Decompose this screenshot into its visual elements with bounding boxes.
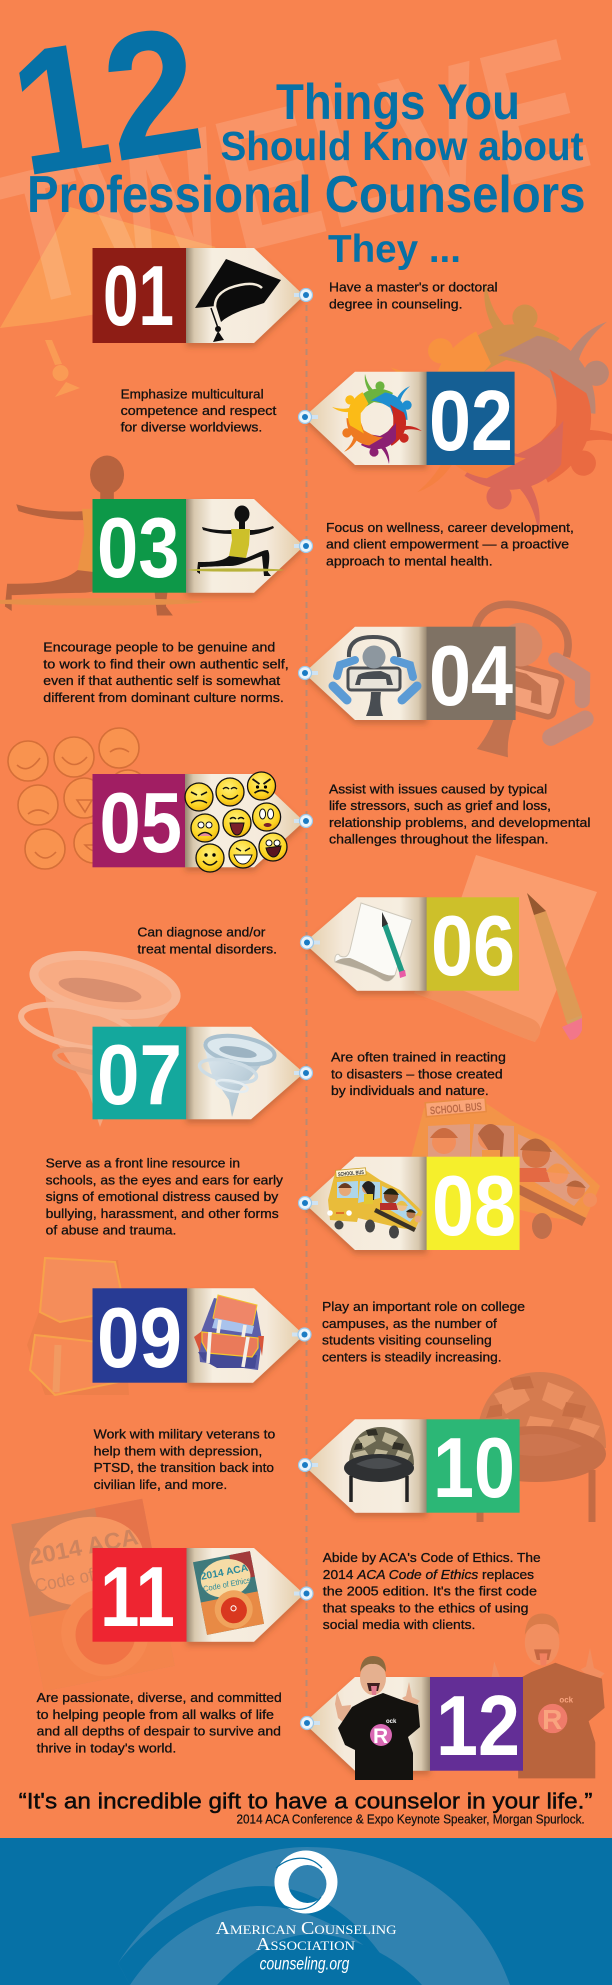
quote: “It's an incredible gift to have a counselor in your life.” — [19, 1788, 592, 1813]
text 09: students visiting counseling — [322, 1333, 492, 1348]
text 01: Have a master's or doctoral — [329, 280, 498, 295]
number square 09 — [92, 1288, 187, 1383]
connector 05 — [294, 814, 312, 828]
watermark: code of ethics book — [11, 1499, 175, 1691]
watermark: paper and pencil — [414, 855, 597, 1042]
title: Things You: Things You — [276, 74, 520, 130]
icon: backpack — [194, 1295, 264, 1370]
text 01 — [329, 280, 498, 312]
tag 09 — [187, 1288, 304, 1383]
text 07: to disasters – those created — [331, 1066, 503, 1081]
number 09: 09 — [97, 1291, 182, 1386]
tag 07 — [186, 1027, 304, 1119]
text 08 — [46, 1156, 284, 1238]
card 03 — [92, 499, 312, 596]
text 02: for diverse worldviews. — [121, 420, 262, 435]
icon: school bus — [327, 1168, 423, 1238]
text 09: Play an important role on college — [322, 1299, 525, 1314]
connector 06 — [300, 936, 320, 949]
text 02: competence and respect — [121, 403, 277, 418]
text 03: and client empowerment — a proactive — [326, 537, 569, 552]
text 05 — [329, 781, 591, 847]
text 11: the 2005 edition. It's the first code — [323, 1584, 537, 1599]
text 05: relationship problems, and developmental — [329, 815, 591, 830]
text 01: degree in counseling. — [329, 296, 462, 312]
number 04: 04 — [429, 629, 513, 724]
watermark: emoji faces — [8, 728, 148, 869]
watermark: diversity ring — [373, 277, 612, 537]
tag 12 — [304, 1677, 430, 1771]
organization name — [216, 1918, 396, 1954]
text 09 — [322, 1299, 525, 1364]
icon: diversity ring — [329, 374, 425, 464]
text 08: of abuse and trauma. — [46, 1223, 176, 1238]
quote attribution: 2014 ACA Conference & Expo Keynote Speaker, Morgan Spurlock. — [236, 1812, 585, 1826]
organization name: Association — [256, 1934, 356, 1954]
number square 10 — [427, 1419, 520, 1513]
number 03: 03 — [97, 501, 180, 596]
text 06 — [137, 925, 277, 956]
text 06: Can diagnose and/or — [137, 925, 266, 940]
number 11: 11 — [100, 1550, 175, 1645]
card 10 — [298, 1419, 520, 1516]
text 10 — [94, 1427, 275, 1492]
text 11: that speaks to the ethics of using — [323, 1600, 528, 1616]
text 10: help them with depression, — [94, 1443, 262, 1458]
connector 12 — [300, 1716, 320, 1730]
text 11: Abide by ACA's Code of Ethics. The — [323, 1550, 541, 1565]
text 08: Serve as a front line resource in — [46, 1156, 240, 1171]
footer arcs — [118, 1847, 510, 1985]
number 02: 02 — [429, 374, 513, 469]
card 05 — [92, 772, 312, 872]
text 07 — [331, 1050, 506, 1098]
connector 08 — [298, 1196, 318, 1210]
text 10: PTSD, the transition back into — [94, 1460, 274, 1475]
card 09 — [92, 1288, 311, 1386]
number square 01 — [92, 248, 186, 343]
text 03: Focus on wellness, career development, — [326, 520, 574, 535]
connector 03 — [294, 540, 312, 552]
text 07: by individuals and nature. — [331, 1083, 489, 1098]
connector 11 — [294, 1587, 313, 1600]
connector 09 — [292, 1328, 311, 1341]
text 12: Are passionate, diverse, and committed — [37, 1690, 282, 1705]
watermark: backpack — [27, 1258, 129, 1395]
icon: keynote speaker photo — [335, 1656, 420, 1780]
text 11: 2014 ACA Code of Ethics replaces — [323, 1567, 535, 1582]
tag 01 — [186, 248, 304, 343]
text 06: treat mental disorders. — [137, 942, 277, 956]
card 12 — [300, 1656, 523, 1780]
number square 11 — [92, 1548, 186, 1642]
watermark: graduation cap — [0, 207, 216, 397]
logo ring — [274, 1850, 337, 1914]
text 03: approach to mental health. — [326, 554, 493, 568]
text 08: bullying, harassment, and other forms — [46, 1206, 279, 1221]
text 04: to work to find their own authentic self, — [43, 656, 289, 672]
connector 04 — [298, 666, 318, 680]
tag 11 — [186, 1548, 304, 1642]
tag 06 — [304, 897, 427, 991]
watermark: helmet — [466, 1372, 606, 1522]
text 04 — [43, 640, 289, 705]
text 05: Assist with issues caused by typical — [329, 781, 547, 796]
text 12: thrive in today's world. — [37, 1740, 176, 1756]
text 02: Emphasize multicultural — [121, 386, 264, 401]
number square 07 — [92, 1027, 186, 1119]
icon: tornado — [198, 1031, 277, 1117]
text 04: different from dominant culture norms. — [43, 690, 284, 705]
icon: paper and pencil — [335, 903, 412, 981]
icon: yoga figure — [188, 506, 284, 576]
text 12 — [37, 1690, 282, 1756]
number square 12 — [430, 1677, 523, 1771]
icon: graduation cap — [195, 259, 281, 342]
number square 08 — [427, 1157, 520, 1250]
text 10: Work with military veterans to — [94, 1427, 275, 1442]
card 04 — [298, 627, 516, 724]
text 08: signs of emotional distress caused by — [46, 1189, 279, 1204]
icon: emoji faces — [185, 772, 287, 872]
watermark: keynote speaker — [492, 1613, 605, 1778]
number square 05 — [92, 774, 185, 867]
organization name: American Counseling — [216, 1918, 396, 1938]
watermark: school bus — [408, 1098, 600, 1239]
icon: counselling desk figure — [333, 637, 417, 716]
watermark: yoga figure — [0, 455, 202, 616]
connector 01 — [294, 288, 312, 302]
title block — [0, 0, 586, 271]
connector 10 — [298, 1458, 318, 1472]
tag 04 — [304, 627, 427, 720]
tag 03 — [186, 499, 304, 593]
text 08: schools, as the eyes and ears for early — [46, 1172, 284, 1188]
text 12: and all depths of despair to survive and — [37, 1724, 281, 1739]
text 02 — [121, 386, 277, 435]
connector 02 — [298, 410, 318, 424]
number square 03 — [92, 499, 186, 593]
number 01: 01 — [103, 249, 174, 344]
watermark: tornado — [17, 946, 181, 1127]
tag 02 — [304, 372, 427, 465]
number 07: 07 — [97, 1028, 182, 1123]
card 08 — [298, 1157, 520, 1254]
tag 05 — [185, 774, 304, 867]
number 08: 08 — [432, 1159, 516, 1254]
text 04: Encourage people to be genuine and — [43, 640, 275, 655]
text 04: even if that authentic self is somewhat — [43, 673, 281, 688]
card 02 — [298, 372, 515, 469]
icon: code of ethics book — [193, 1551, 264, 1635]
text 05: life stressors, such as grief and loss, — [329, 798, 551, 813]
connector 07 — [294, 1066, 312, 1080]
card 11 — [92, 1548, 313, 1645]
card 01 — [92, 248, 312, 344]
number square 06 — [427, 897, 519, 991]
text 09: campuses, as the number of — [322, 1316, 497, 1331]
text 11 — [323, 1550, 541, 1632]
number square 04 — [427, 627, 516, 720]
text 12: to helping people from all walks of life — [37, 1707, 274, 1722]
text 03 — [326, 520, 574, 568]
text 07: Are often trained in reacting — [331, 1050, 506, 1065]
text 10: civilian life, and more. — [94, 1477, 227, 1492]
card 06 — [300, 897, 519, 994]
text 05: challenges throughout the lifespan. — [329, 832, 548, 847]
number 06: 06 — [431, 899, 515, 994]
number square 02 — [427, 372, 515, 465]
dashed centre line — [306, 305, 308, 1712]
card 07 — [92, 1027, 312, 1123]
text 09: centers is steadily increasing. — [322, 1350, 502, 1364]
text 11: social media with clients. — [323, 1617, 475, 1632]
watermark: counselling desk figure — [416, 588, 609, 774]
number 05: 05 — [100, 776, 182, 871]
footer band — [0, 1838, 612, 1985]
number 10: 10 — [433, 1421, 515, 1516]
number 12: 12 — [436, 1679, 520, 1774]
icon: helmet — [344, 1427, 414, 1502]
subtitle: They: They ... — [328, 228, 461, 271]
title: Should Know about: Should Know about — [220, 123, 584, 169]
tag 10 — [304, 1419, 427, 1513]
tag 08 — [304, 1157, 427, 1250]
website: counseling.org — [260, 1953, 350, 1973]
